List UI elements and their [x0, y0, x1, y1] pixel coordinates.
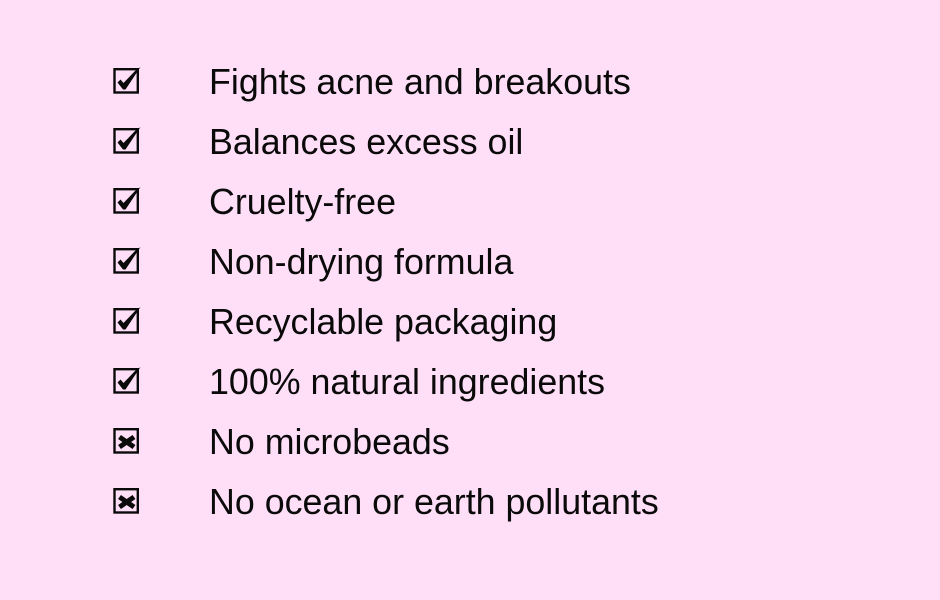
item: No ocean or earth pollutants: No ocean or earth pollutants	[209, 482, 659, 522]
item: Fights acne and breakouts: Fights acne and breakouts	[209, 62, 631, 102]
item: Recyclable packaging: Recyclable packaging	[209, 302, 557, 342]
item: Balances excess oil: Balances excess oil	[209, 122, 523, 162]
item: Cruelty-free: Cruelty-free	[209, 182, 396, 222]
item: No microbeads: No microbeads	[209, 422, 450, 462]
item: 100% natural ingredients: 100% natural ingredients	[209, 362, 605, 402]
item: Non-drying formula: Non-drying formula	[209, 242, 513, 282]
checklist	[113, 62, 659, 522]
item: Cruelty-free	[113, 182, 396, 222]
